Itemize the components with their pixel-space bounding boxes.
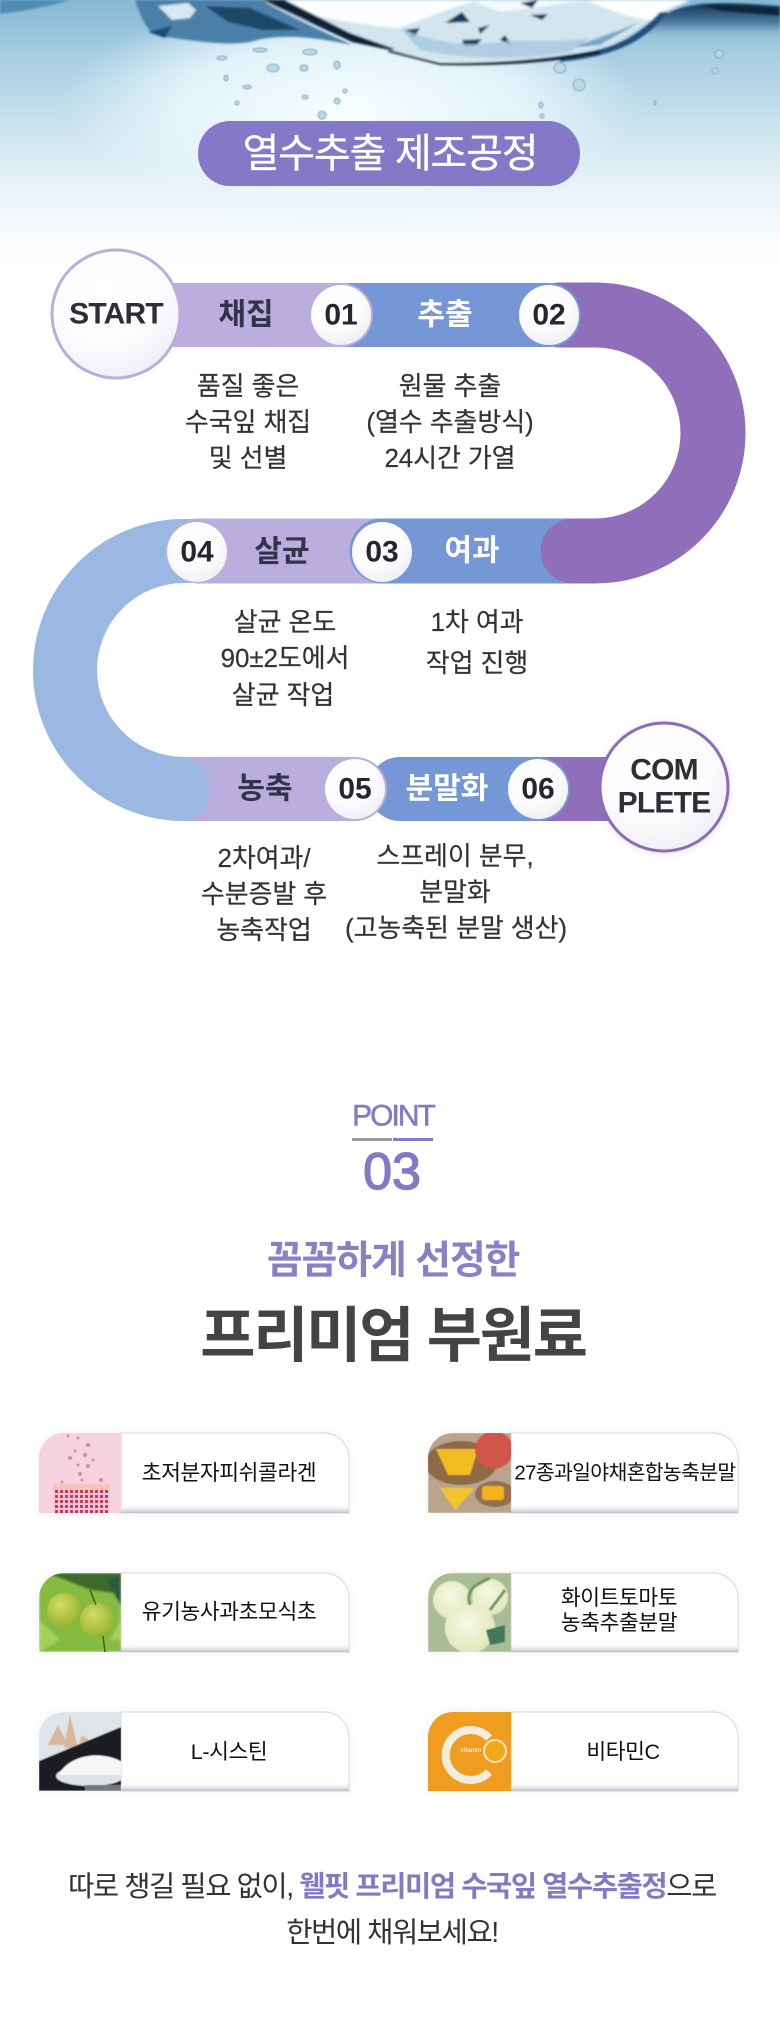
- card: L-시스틴: [39, 1712, 349, 1792]
- title pill: [198, 121, 580, 186]
- step 04: 살균: 살균 작업: [232, 680, 334, 710]
- card: 비타민C: 비타민C: [586, 1740, 660, 1764]
- subheading: 꼼꼼하게 선정한: [267, 1240, 520, 1282]
- image: collagen particles: [39, 1433, 121, 1513]
- step 04: 살균: 90±2도에서: [221, 643, 349, 673]
- image: white tomatoes: [428, 1573, 511, 1653]
- step 05: 농축: [201, 759, 385, 945]
- step 06: 분말화: 스프레이 분무,: [376, 841, 534, 871]
- point label: [352, 1100, 436, 1201]
- step 01: 채집: 채집: [218, 298, 274, 332]
- step 03: 여과: 여과: [444, 534, 500, 568]
- card: 화이트토마토 농축추출분말: [428, 1573, 738, 1653]
- complete badge: COM: [630, 754, 698, 786]
- step 04: 살균: [167, 522, 349, 710]
- card: 화이트토마토 농축추출분말: 화이트토마토: [561, 1586, 677, 1610]
- image: vitamin C: [428, 1712, 511, 1792]
- card: 27종과일야채혼합농축분말: 27종과일야채혼합농축분말: [514, 1462, 736, 1484]
- point label: 03: [363, 1143, 421, 1201]
- step 06: 분말화: (고농축된 분말 생산): [345, 913, 567, 943]
- main heading: 프리미엄 부원료: [200, 1302, 586, 1370]
- step 04: 살균: 04: [180, 536, 214, 568]
- step 02: 추출: [366, 285, 579, 473]
- card: 비타민C: [428, 1712, 738, 1792]
- step 03: 여과: 03: [365, 536, 399, 568]
- step 05: 농축: 05: [338, 772, 372, 806]
- closing message: 따로 챙길 필요 없이, 웰핏 프리미엄 수국잎 열수추출정으로: [68, 1871, 716, 1903]
- process flow ribbon: [65, 315, 713, 821]
- step 04: 살균: 살균 온도: [234, 607, 336, 637]
- image: vitamin C: vitamin: [460, 1748, 482, 1754]
- step 05: 농축: 2차여과/: [218, 843, 311, 873]
- step 06: 분말화: [345, 759, 568, 943]
- step 04: 살균: 살균: [254, 536, 310, 568]
- step 03: 여과: 작업 진행: [426, 648, 528, 678]
- card: 초저분자피쉬콜라겐: 초저분자피쉬콜라겐: [142, 1461, 316, 1485]
- image: mango: [428, 1433, 511, 1513]
- step 03: 여과: 1차 여과: [431, 607, 524, 637]
- title pill: 열수추출 제조공정: [243, 132, 537, 176]
- step 06: 분말화: 06: [521, 772, 555, 806]
- start badge: [52, 250, 180, 378]
- closing message: 한번에 채워보세요!: [286, 1917, 498, 1949]
- card: 27종과일야채혼합농축분말: [425, 1431, 738, 1513]
- step 05: 농축: 수분증발 후: [201, 879, 327, 909]
- complete badge: [599, 723, 729, 853]
- step 01: 채집: [185, 285, 371, 473]
- step 01: 채집: 01: [324, 298, 358, 332]
- step 02: 추출: (열수 추출방식): [366, 407, 534, 437]
- card: 화이트토마토 농축추출분말: 농축추출분말: [561, 1611, 678, 1635]
- card: L-시스틴: L-시스틴: [191, 1740, 267, 1764]
- step 06: 분말화: 분말화: [419, 877, 491, 907]
- step 01: 채집: 및 선별: [209, 443, 287, 473]
- step 01: 채집: 품질 좋은: [197, 371, 299, 401]
- point label: POINT: [352, 1100, 436, 1132]
- water photo background: [0, 0, 780, 270]
- card: 초저분자피쉬콜라겐: [39, 1433, 349, 1513]
- step 02: 추출: 24시간 가열: [384, 443, 516, 473]
- step 06: 분말화: 분말화: [406, 772, 488, 806]
- step 02: 추출: 추출: [417, 298, 473, 332]
- complete badge: PLETE: [618, 786, 710, 820]
- image: green apples: [39, 1573, 121, 1652]
- step 03: 여과: [352, 522, 528, 678]
- step 02: 추출: 원물 추출: [399, 371, 501, 401]
- image: white powder dish: [39, 1712, 124, 1792]
- step 05: 농축: 농축: [237, 772, 293, 806]
- card: 유기농사과초모식초: [39, 1573, 349, 1652]
- step 02: 추출: 02: [532, 298, 566, 332]
- card: 유기농사과초모식초: 유기농사과초모식초: [142, 1600, 316, 1624]
- start badge: START: [69, 298, 163, 330]
- step 01: 채집: 수국잎 채집: [185, 407, 311, 437]
- closing message: [68, 1871, 716, 1949]
- step 05: 농축: 농축작업: [216, 915, 312, 945]
